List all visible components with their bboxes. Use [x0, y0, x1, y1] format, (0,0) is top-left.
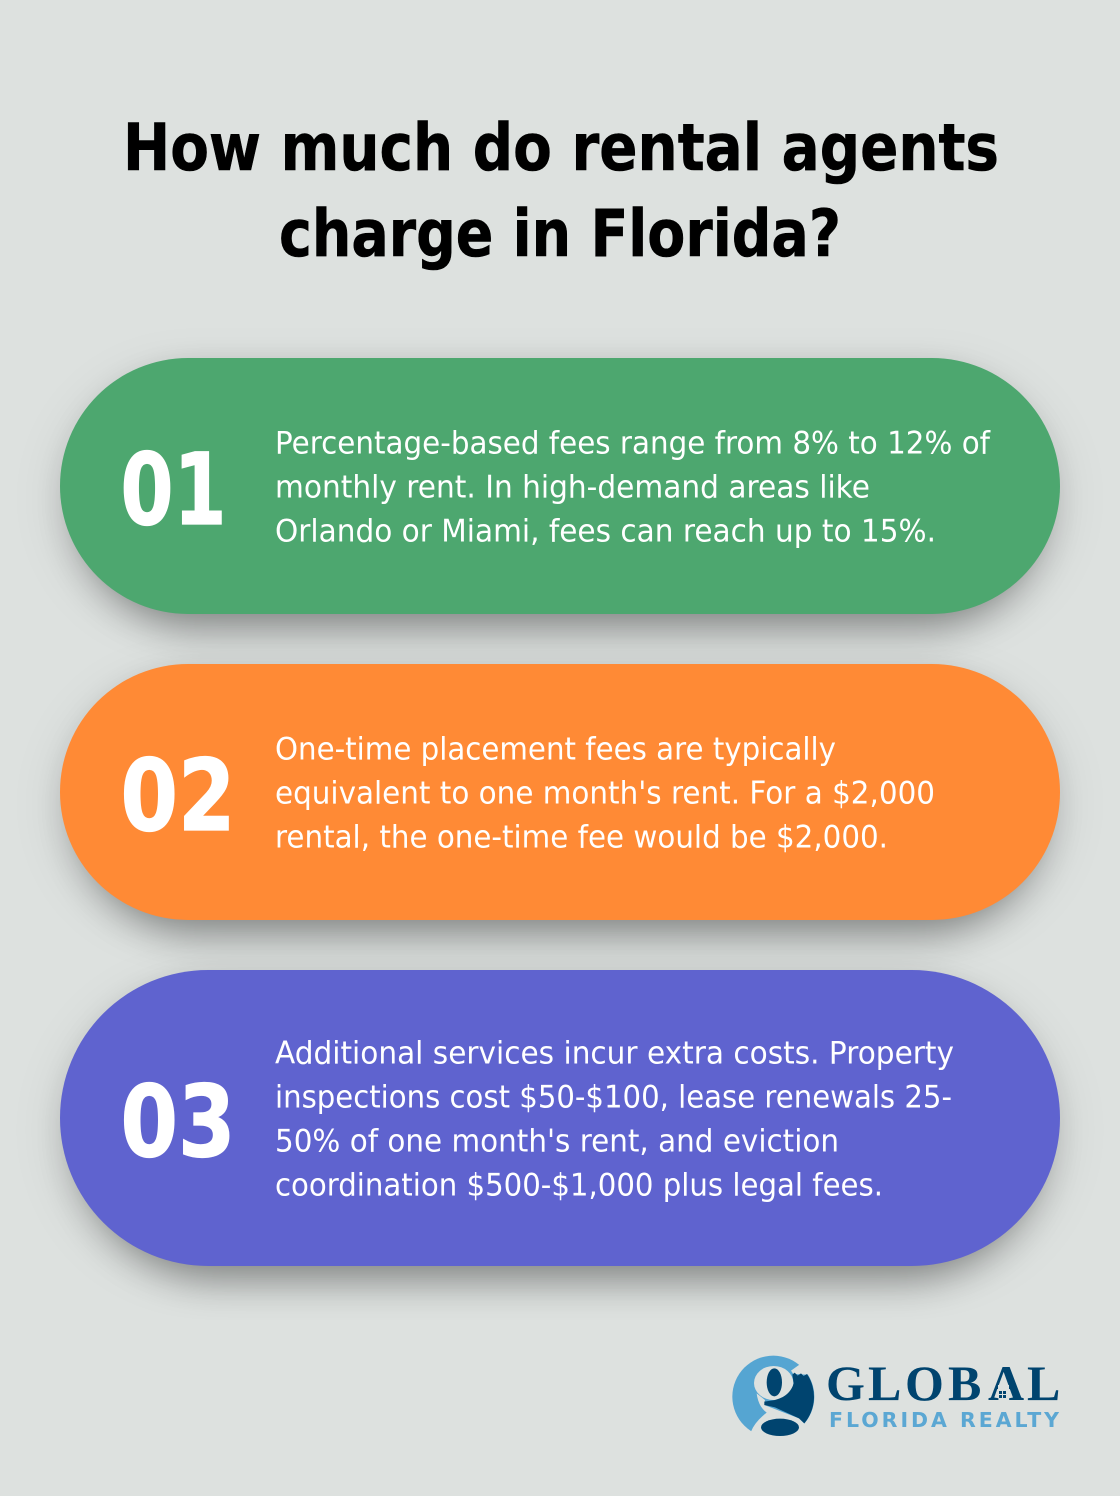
- text: card 03 body: Additional services incur extra costs. Property: [275, 1035, 954, 1071]
- text: card 01 body: [275, 425, 991, 549]
- title: [123, 111, 999, 272]
- text: card 03 body: 50% of one month's rent, and eviction: [275, 1123, 839, 1159]
- text: card 01 body: Orlando or Miami, fees can reach up to 15%.: [275, 513, 936, 549]
- text: GLOBAL: GLOBAL: [826, 1355, 1060, 1411]
- text: card 02 body: [275, 731, 935, 855]
- title: How much do rental agents: [123, 111, 999, 186]
- text: FLORIDA REALTY: FLORIDA REALTY: [829, 1408, 1060, 1432]
- logo: Global Florida Realty: [732, 1355, 1060, 1439]
- text: card 02 body: equivalent to one month's rent. For a $2,000: [275, 775, 935, 811]
- number 01: 01: [120, 433, 226, 548]
- title: charge in Florida?: [279, 197, 841, 272]
- text: card 03 body: [275, 1035, 954, 1203]
- text: card 02 body: rental, the one-time fee would be $2,000.: [275, 819, 888, 855]
- text: card 01 body: monthly rent. In high-demand areas like: [275, 469, 870, 505]
- text: card 03 body: coordination $500-$1,000 plus legal fees.: [275, 1167, 883, 1203]
- panel: card 03 additional services: [55, 970, 1065, 1280]
- number 03: 03: [120, 1065, 236, 1180]
- text: card 02 body: One-time placement fees are typically: [275, 731, 836, 767]
- panel: card 01 percentage-based fees: [55, 358, 1065, 628]
- number 02: 02: [120, 739, 236, 854]
- panel: card 02 placement fees: [55, 664, 1065, 934]
- text: card 01 body: Percentage-based fees range from 8% to 12% of: [275, 425, 991, 461]
- icon: g monogram circle: [732, 1356, 814, 1439]
- text: card 03 body: inspections cost $50-$100, lease renewals 25-: [275, 1079, 952, 1115]
